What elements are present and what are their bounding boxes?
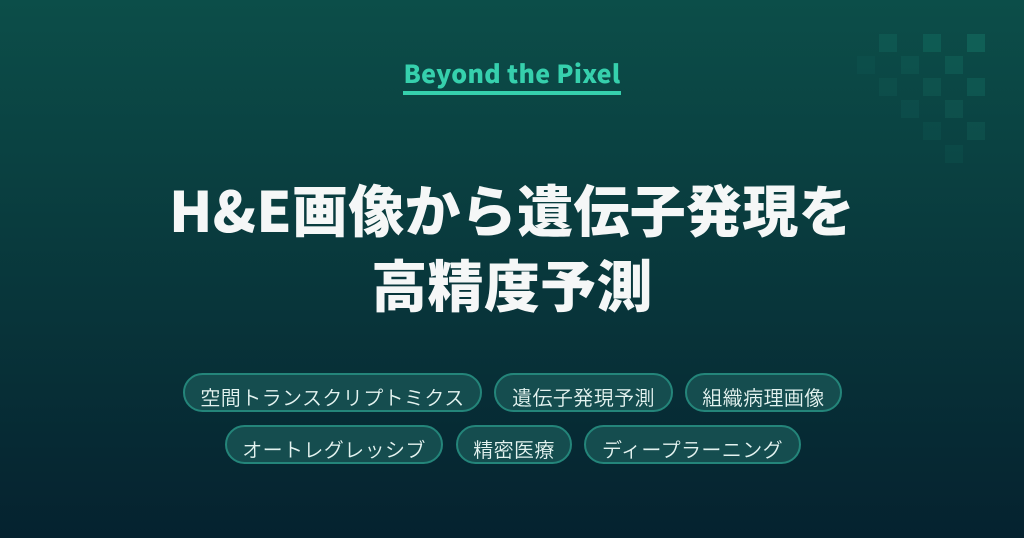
series label: Beyond the Pixel: Beyond the Pixel: [404, 55, 620, 91]
tags: [183, 373, 842, 464]
tag: spatial transcriptomics: [183, 373, 482, 412]
tag: deep learning: [584, 425, 801, 464]
tag: gene expression prediction: [494, 373, 673, 412]
tag: precision medicine: 精密医療: [473, 434, 555, 463]
tag: histopathology images: [685, 373, 842, 412]
title: H&E画像から遺伝子発現を: [169, 168, 855, 249]
title: [169, 168, 855, 324]
tag: deep learning: ディープラーニング: [602, 434, 783, 463]
tag: autoregressive: オートレグレッシブ: [242, 434, 426, 463]
tag: histopathology images: 組織病理画像: [702, 382, 825, 411]
tag: autoregressive: [225, 425, 443, 464]
tag: spatial transcriptomics: 空間トランスクリプトミクス: [200, 382, 465, 411]
tag: gene expression prediction: 遺伝子発現予測: [512, 382, 655, 411]
title: 高精度予測: [371, 243, 653, 324]
tag: precision medicine: [456, 425, 572, 464]
decorative pixel grid: [879, 34, 985, 140]
